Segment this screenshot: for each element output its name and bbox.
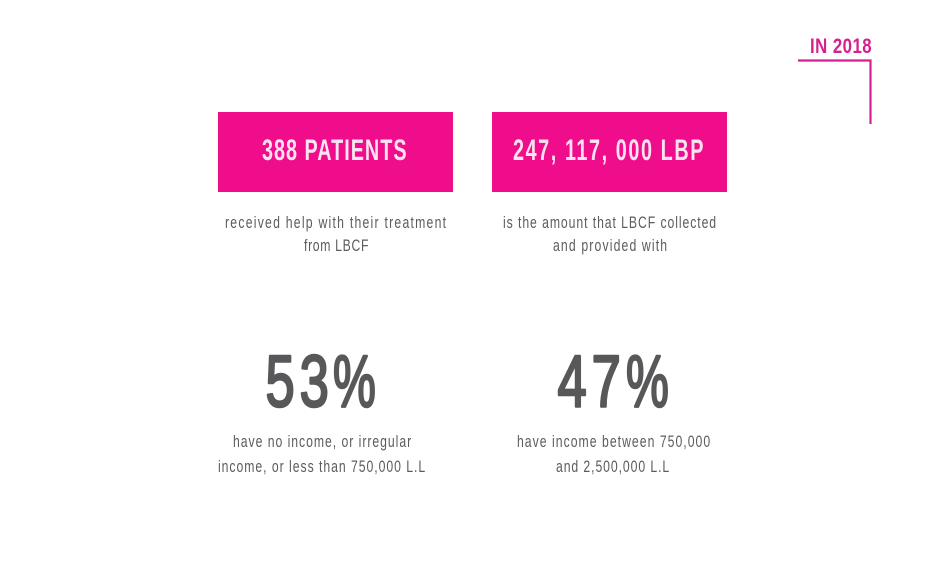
47 percent description: [517, 433, 710, 477]
box label: 388 patients: 388 PATIENTS: [262, 134, 407, 167]
big number: 47%: [558, 341, 669, 423]
53 percent description: have no income, or irregular: [233, 433, 411, 452]
47 percent description: have income between 750,000: [517, 433, 710, 452]
big number: 53%: 53: [266, 341, 329, 423]
big number: 53%: [266, 341, 376, 423]
amount description: [503, 214, 716, 256]
amount description: is the amount that LBCF collected: [503, 214, 716, 233]
pink box: amount: [492, 112, 727, 192]
patients description: received help with their treatment: [225, 214, 446, 233]
patients description: [225, 214, 446, 256]
panel: patients: [218, 112, 453, 256]
53 percent description: income, or less than 750,000 L.L: [218, 458, 425, 477]
panel: amount: [492, 112, 727, 256]
47 percent description: and 2,500,000 L.L: [556, 458, 669, 477]
box label: amount in LBP: 247, 117, 000 LBP: [513, 134, 703, 167]
heading: in 2018: IN 2018: [810, 35, 872, 59]
panel: 47 percent: [517, 341, 710, 477]
big number: 47%: %: [626, 342, 669, 423]
big number: 53%: %: [333, 342, 376, 423]
53 percent description: [218, 433, 425, 477]
amount description: and provided with: [553, 237, 667, 256]
big number: 47%: 47: [558, 341, 621, 423]
panel: 53 percent: [218, 341, 425, 477]
corner bracket: [798, 60, 870, 124]
pink box: patients: [218, 112, 453, 192]
patients description: from LBCF: [304, 237, 368, 256]
